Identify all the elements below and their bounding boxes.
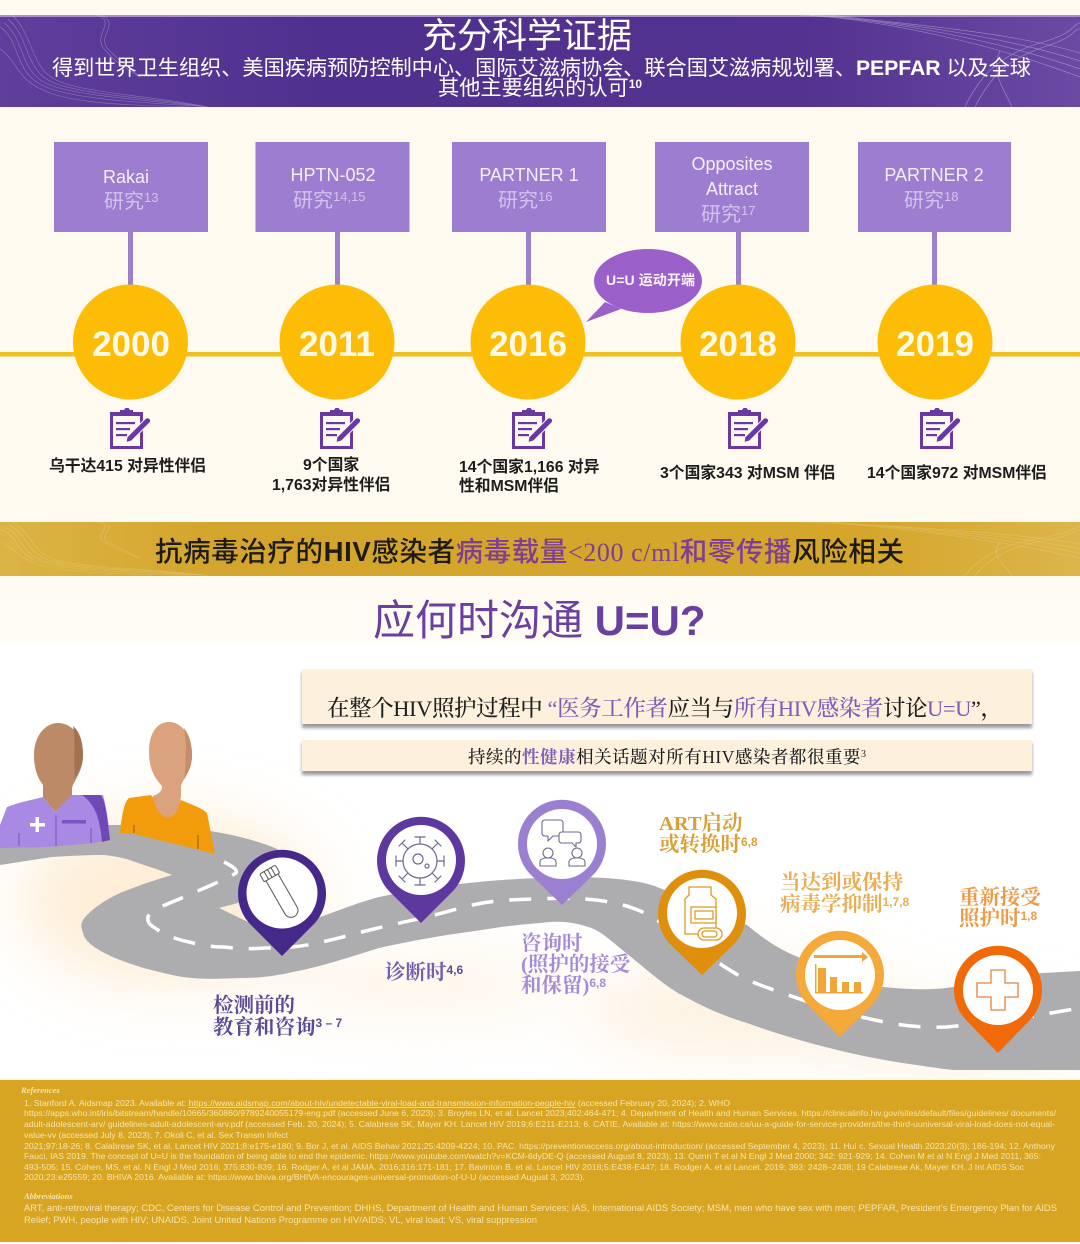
- label: ART initiation or switch: 6,8: [741, 835, 758, 849]
- label: at diagnosis: 4,6: [446, 963, 464, 977]
- label: viral suppression: 1,7,8: [882, 895, 910, 909]
- person: health care worker: [0, 723, 110, 848]
- label: viral suppression: 病毒学抑制: [780, 894, 882, 916]
- label: at counselling: 咨询时: [521, 932, 583, 955]
- references list: value-vv (accessed July 8, 2023); 7. Okoli C, et al. Sex Transm Infect: [24, 1130, 289, 1140]
- pin: pre-test education and counselling: [238, 850, 326, 956]
- label: at counselling: 6,8: [589, 976, 606, 990]
- study column: PARTNER 2 2019: 研究: [904, 190, 944, 212]
- label: viral suppression: 当达到或保持: [780, 871, 903, 894]
- study column: Rakai 2000: [49, 142, 208, 475]
- references list: [24, 1098, 1057, 1182]
- header banner: scientific evidence: 充分科学证据: [422, 17, 632, 56]
- pin: when achieving or maintaining viral suppression: [796, 931, 884, 1037]
- callout: U=U campaign start: U=U 运动开端: [606, 272, 695, 288]
- references list: https://apps.who.int/iris/bitstream/handle/10665/360860/9789240055179-eng.pdf (accessed June 6, 2023); 3. Broyles LN, et al. Lancet 2023;402:464-471; 4. Department of Health and Human Services. https://clinicalinfo.hiv.gov/sites/default/files/guidelines/ documents/: [24, 1108, 1057, 1118]
- gold banner: viral load statement: [0, 522, 1080, 576]
- study column: HPTN-052 2011: 9个国家: [303, 455, 359, 474]
- study column: PARTNER 2 2019: 18: [944, 189, 958, 204]
- study column: HPTN-052 2011: 研究: [293, 190, 333, 212]
- study column: Opposites Attract 2018: Opposites: [691, 154, 773, 174]
- header banner: scientific evidence: 得到世界卫生组织、美国疾病预防控制中心、国际艾滋病协会、联合国艾滋病规划署、PEPFAR 以及全球: [52, 56, 1031, 80]
- label: re-engagement in care: 照护时: [959, 908, 1020, 930]
- label: at counselling: [521, 932, 631, 997]
- quote box: discuss U=U with all people living with HIV: 在整个HIV照护过程中 “医务工作者应当与所有HIV感染者讨论U=U”，: [327, 696, 1003, 722]
- header banner: scientific evidence: 10: [629, 77, 642, 91]
- abbreviations heading: Abbreviations: [23, 1191, 73, 1201]
- study column: HPTN-052 2011: HPTN-052: [290, 165, 376, 185]
- label: pre-test second line: 教育和咨询: [213, 1017, 316, 1039]
- pin: re-engagement in care: [954, 946, 1042, 1053]
- study column: Opposites Attract 2018: [655, 142, 836, 482]
- study column: Rakai 2000: 13: [144, 190, 158, 205]
- study column: HPTN-052 2011: 14,15: [333, 189, 366, 204]
- references list: 493-505; 15. Cohen, MS, et al. N Engl J Med 2016; 375:830-839; 16. Rodger A. et al JAMA. 2016;316:171-181; 17. Bavinton B. et al. Lancet HIV 2018;5:E438-E447; 18. Rodger A. et al Lancet. 2019; 393: 2428–2438; 19 Calabrese Ak, Mayer KH. J Int AIDS Soc: [24, 1162, 1025, 1172]
- header banner: scientific evidence: 其他主要组织的认可: [438, 77, 629, 100]
- footer panel: references and abbreviations: [0, 1078, 1080, 1244]
- study column: PARTNER 1 2016: 16: [538, 189, 552, 204]
- label: pre-test education and counselling: 检测前的: [213, 994, 295, 1017]
- references list: 1. Stanford A. Aidsmap 2023. Available at: https://www.aidsmap.com/about-hiv/undetectable-viral-load-and-transmission-information-people-hiv (accessed February 20, 2024); 2. WHO: [24, 1098, 730, 1108]
- road: [0, 825, 1080, 1070]
- study column: PARTNER 2 2019: 2019: [896, 325, 974, 364]
- label: at diagnosis: 诊断时: [385, 962, 446, 984]
- pin: at counselling: [518, 800, 606, 905]
- quote box: discuss U=U with all people living with HIV: [302, 669, 1032, 728]
- section background: [0, 576, 1080, 645]
- timeline axis: [0, 352, 1080, 356]
- study column: Rakai 2000: Rakai: [103, 167, 149, 187]
- study column: Opposites Attract 2018: 17: [741, 203, 755, 218]
- study column: HPTN-052 2011: 1,763对异性伴侣: [272, 475, 391, 494]
- header banner: scientific evidence: [0, 15, 1080, 107]
- abbreviations list: Relief; PWH, people with HIV; UNAIDS, Joint United Nations Programme on HIV/AIDS; VL, viral load; VS, viral suppression: [24, 1214, 537, 1225]
- study column: PARTNER 1 2016: 14个国家1,166 对异: [459, 457, 600, 476]
- study column: HPTN-052 2011: 2011: [299, 325, 375, 364]
- label: ART initiation or switch: ART启动: [659, 812, 743, 835]
- heading: when to communicate U=U: 应何时沟通 U=U?: [373, 597, 706, 644]
- study column: Rakai 2000: 2000: [92, 325, 170, 364]
- study column: PARTNER 1 2016: 研究: [498, 190, 538, 212]
- label: viral suppression: [780, 871, 910, 916]
- study column: Opposites Attract 2018: 研究: [701, 204, 741, 226]
- label: re-engagement in care: 1,8: [1020, 909, 1038, 923]
- pin: at diagnosis: [377, 817, 465, 923]
- pin: ART initiation or switch: [658, 870, 746, 975]
- study column: PARTNER 2 2019: [858, 142, 1047, 482]
- abbreviations list: [24, 1202, 1057, 1225]
- study column: Opposites Attract 2018: 2018: [699, 325, 777, 364]
- study column: Rakai 2000: 乌干达415 对异性伴侣: [49, 456, 206, 475]
- label: re-engagement in care: 重新接受: [959, 886, 1041, 909]
- label: pre-test second line: 3 – 7: [316, 1016, 343, 1030]
- label: at counselling: (照护的接受: [521, 953, 631, 976]
- references heading: References: [20, 1085, 60, 1095]
- study column: Opposites Attract 2018: Attract: [706, 179, 758, 199]
- quote box: sexual health topics: 3: [861, 749, 866, 760]
- abbreviations list: ART, anti-retroviral therapy; CDC, Centers for Disease Control and Prevention; DHHS, Department of Health and Human Services; IAS, International AIDS Society; MSM, men who have sex with men; PEPFAR, President’s Emergency Plan for AIDS: [24, 1202, 1057, 1213]
- label: at counselling: 和保留): [521, 975, 589, 997]
- label: ART initiation or switch: [659, 812, 758, 856]
- label: re-engagement in care: [959, 886, 1041, 930]
- study column: PARTNER 2 2019: 14个国家972 对MSM伴侣: [867, 463, 1047, 482]
- gold banner: viral load statement: 抗病毒治疗的HIV感染者病毒载量<200 c/ml和零传播风险相关: [155, 536, 904, 567]
- references list: Fauci, IAS 2019. The concept of U=U is the foundation of being able to end the epidemic. https://www.youtube.com/watch?v=KCM-6dyDE-Q (accessed August 8, 2023); 13. Quinn T et al N Engl J Med 2000; 342: 921-929; 14. Cohen M et al N Engl J Med 2011, 365:: [24, 1151, 1041, 1161]
- person: person living with HIV: [120, 722, 215, 854]
- quote box: sexual health topics: 持续的性健康相关话题对所有HIV感染者都很重要: [468, 747, 860, 767]
- references list: 2021;97:18-26; 8. Calabrese SK, et al. Lancet HIV 2021;8:e175-e180; 9. Bor J, et al. AIDS Behav 2021;25:4209-4224; 10. PAC. https://preventionaccess.org/about-introduction/ (accessed September 4, 2023); 11. Hui c. Sexual Health 2023;20(3); 186-194; 12. Anthony: [24, 1141, 1056, 1151]
- study column: Rakai 2000: 研究: [104, 191, 144, 213]
- study column: PARTNER 1 2016: PARTNER 1: [479, 165, 579, 185]
- label: ART initiation or switch: 或转换时: [659, 834, 741, 856]
- callout: U=U campaign start: [586, 249, 702, 322]
- references list: adult-adolescent-arv/ guidelines-adult-adolescent-arv.pdf (accessed Feb. 20, 2024); 5. Calabrese SK, Mayer KH. Lancet HIV 2019;6:E211-E213; 6. CATIE. Available at: https://www.catie.ca/uu-a-guide-for-service-providers/the-third-uuniversal-viral-load-does-not-equal-: [24, 1119, 1055, 1129]
- study column: PARTNER 2 2019: PARTNER 2: [884, 165, 984, 185]
- quote box: sexual health topics: [302, 740, 1032, 775]
- study column: PARTNER 1 2016: 2016: [489, 325, 567, 364]
- references list: 2020;23:e25559; 20. BHIVA 2016. Available at: https://www.bhiva.org/BHIVA-encourages-universal-promotion-of-U-U (accessed August 3, 2023).: [24, 1172, 585, 1182]
- study column: PARTNER 1 2016: [452, 142, 606, 495]
- study column: Opposites Attract 2018: 3个国家343 对MSM 伴侣: [660, 463, 836, 482]
- study column: HPTN-052 2011: [256, 142, 410, 494]
- soft peach glow: [20, 815, 1080, 1070]
- study column: PARTNER 1 2016: 性和MSM伴侣: [459, 476, 559, 495]
